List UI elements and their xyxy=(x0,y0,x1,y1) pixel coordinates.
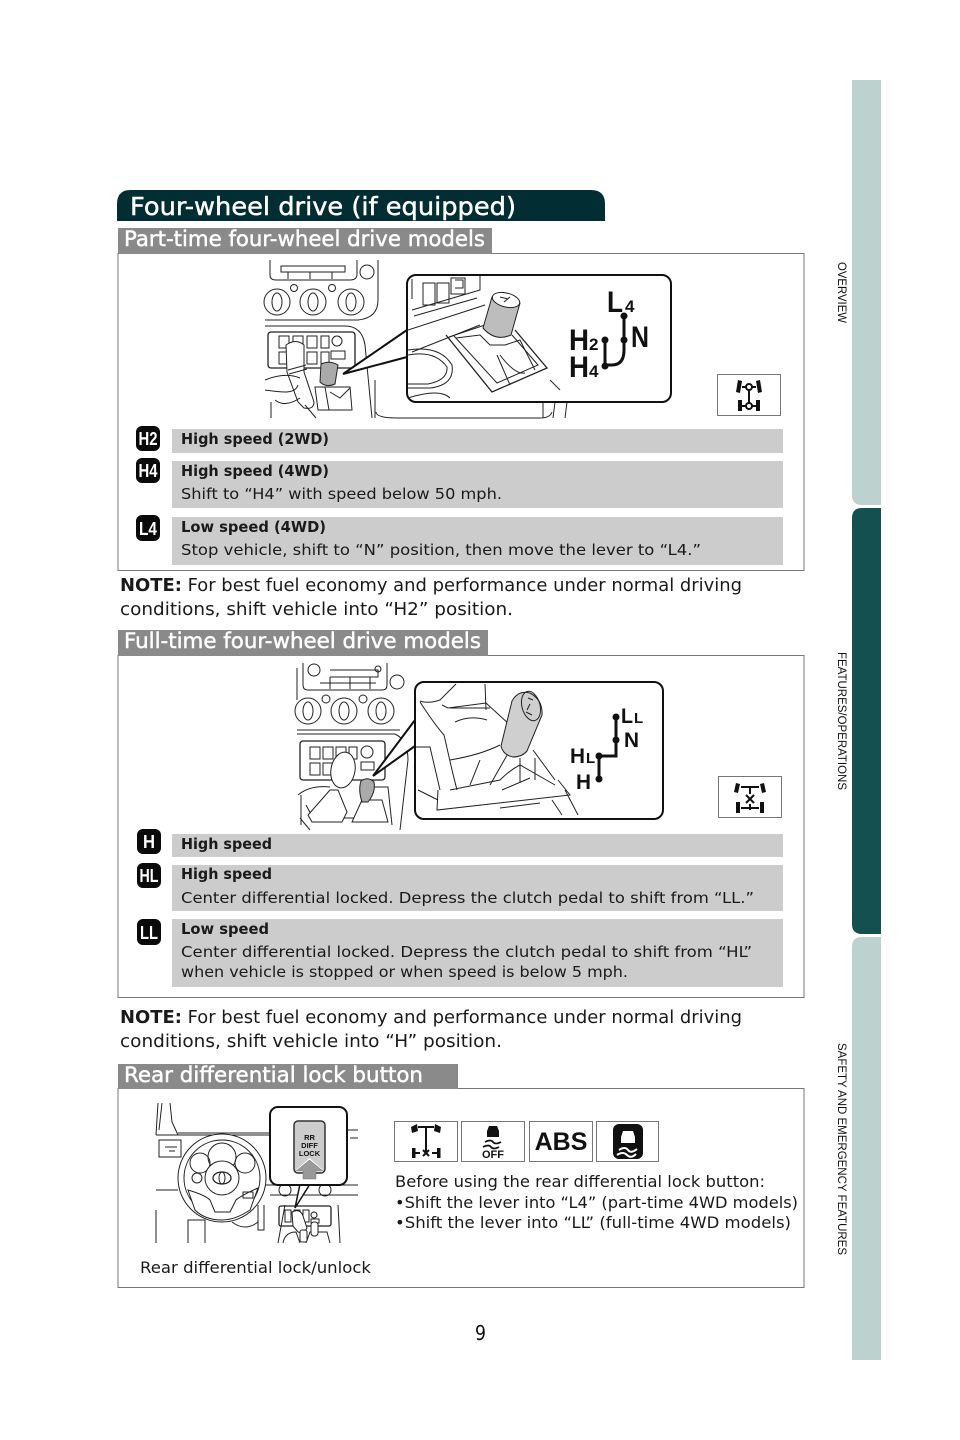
icon: traction control off: OFF xyxy=(482,1149,504,1161)
panel: part-time four-wheel drive xyxy=(118,227,804,570)
text: before using the button: •Shift the lever into “L4” (part-time 4WD models) xyxy=(395,1193,798,1212)
icon: part-time 4WD xyxy=(718,374,780,416)
page number: 9 xyxy=(475,1321,486,1345)
icon: full-time 4WD xyxy=(718,776,782,818)
badge: H: H xyxy=(143,832,155,852)
badge: LL: LL xyxy=(140,923,158,943)
icon: rear differential lock xyxy=(394,1122,458,1162)
badge: H4 xyxy=(136,458,160,483)
illustration: steering wheel and dashboard xyxy=(156,1103,358,1243)
tab: safety and emergency features xyxy=(835,937,881,1360)
shift pattern diagram: L xyxy=(621,705,633,728)
badge: L4 xyxy=(136,515,160,541)
row: L4: Low speed (4WD) xyxy=(181,518,326,536)
shift pattern diagram: L xyxy=(634,710,643,727)
row: HL xyxy=(137,863,783,911)
row: H4: High speed (4WD) xyxy=(181,462,329,480)
badge: H2: H2 xyxy=(138,429,158,449)
shift pattern diagram: H xyxy=(569,324,589,357)
row: HL: Center differential locked. Depress the clutch pedal to shift from “LL.” xyxy=(181,889,754,907)
illustration: part-time dashboard and transfer lever xyxy=(264,260,671,418)
callout: lever closeup xyxy=(407,275,671,402)
callout: RR DIFF LOCK button: RR xyxy=(304,1133,315,1142)
note: full-time xyxy=(120,1007,742,1052)
callout: RR DIFF LOCK button: LOCK xyxy=(299,1149,321,1158)
tab: features and operations: FEATURES/OPERATIONS xyxy=(835,652,847,790)
text: before using the button: •Shift the lever into “LL” (full-time 4WD models) xyxy=(395,1213,791,1232)
shift pattern diagram: 4 xyxy=(589,362,599,381)
panel: full-time four-wheel drive xyxy=(118,629,804,998)
tab: overview xyxy=(835,80,881,505)
row: HL: High speed xyxy=(181,865,272,883)
icon: traction control off xyxy=(462,1122,524,1162)
note: part-time: NOTE: For best fuel economy and performance under normal driving xyxy=(120,575,742,596)
row: L4 xyxy=(136,515,783,565)
panel: rear differential lock xyxy=(118,1063,804,1288)
illustration: full-time dashboard and transfer lever xyxy=(295,663,663,830)
callout: RR DIFF LOCK button xyxy=(270,1107,347,1185)
shift pattern diagram: H xyxy=(576,771,591,794)
row: LL: when vehicle is stopped or when speed is below 5 mph. xyxy=(181,963,628,981)
badge: LL xyxy=(137,919,161,945)
row: H2: High speed (2WD) xyxy=(181,430,329,448)
icon: ABS xyxy=(530,1122,592,1162)
row: LL xyxy=(137,919,783,987)
title banner: Four-wheel drive (if equipped) xyxy=(130,192,516,221)
shift pattern diagram: N xyxy=(631,321,649,354)
note: full-time: NOTE: For best fuel economy and performance under normal driving xyxy=(120,1007,742,1028)
row: H xyxy=(137,829,783,857)
badge: HL xyxy=(137,863,161,888)
note: part-time xyxy=(120,575,742,620)
text: before using the button: Before using the rear differential lock button: xyxy=(395,1172,765,1191)
note: part-time: conditions, shift vehicle into “H2” position. xyxy=(120,599,513,620)
warning icons row xyxy=(394,1122,658,1162)
row: H: High speed xyxy=(181,835,272,853)
text: before using the button xyxy=(395,1172,798,1232)
shift pattern diagram xyxy=(569,286,649,384)
row: H4: Shift to “H4” with speed below 50 mph. xyxy=(181,485,502,503)
heading: full-time models: Full-time four-wheel drive models xyxy=(124,629,481,653)
badge: HL: HL xyxy=(140,866,158,886)
row: LL: Low speed xyxy=(181,920,269,938)
note: full-time: conditions, shift vehicle into “H” position. xyxy=(120,1031,502,1052)
icon: ABS: ABS xyxy=(535,1128,587,1156)
tab: safety and emergency features: SAFETY AND EMERGENCY FEATURES xyxy=(835,1043,847,1255)
row: H2 xyxy=(136,426,783,453)
shift pattern diagram: L xyxy=(607,286,623,319)
badge: H xyxy=(137,829,161,854)
shift pattern diagram: H xyxy=(570,745,585,768)
callout: RR DIFF LOCK button: DIFF xyxy=(301,1141,318,1150)
side navigation tabs xyxy=(835,80,881,1360)
heading: rear differential lock button: Rear differential lock button xyxy=(124,1063,423,1087)
badge: H2 xyxy=(136,426,160,451)
icon: vehicle stability control xyxy=(596,1122,658,1162)
tab: features and operations xyxy=(835,508,881,934)
callout: lever closeup xyxy=(415,682,663,819)
tab: overview: OVERVIEW xyxy=(835,262,847,323)
row: LL: Center differential locked. Depress the clutch pedal to shift from “HL” xyxy=(181,943,752,961)
caption: rear differential lock/unlock: Rear differential lock/unlock xyxy=(140,1258,372,1277)
heading: part-time models: Part-time four-wheel drive models xyxy=(124,227,485,251)
row: H4 xyxy=(136,458,783,508)
row: L4: Stop vehicle, shift to “N” position, then move the lever to “L4.” xyxy=(181,541,701,559)
badge: L4: L4 xyxy=(139,519,157,539)
shift pattern diagram: N xyxy=(624,729,639,752)
shift pattern diagram: L xyxy=(586,750,595,767)
shift pattern diagram: 4 xyxy=(625,297,635,316)
shift pattern diagram: 2 xyxy=(589,335,598,354)
shift pattern diagram: H xyxy=(569,351,589,384)
badge: H4: H4 xyxy=(138,461,158,481)
shift pattern diagram xyxy=(570,705,643,794)
